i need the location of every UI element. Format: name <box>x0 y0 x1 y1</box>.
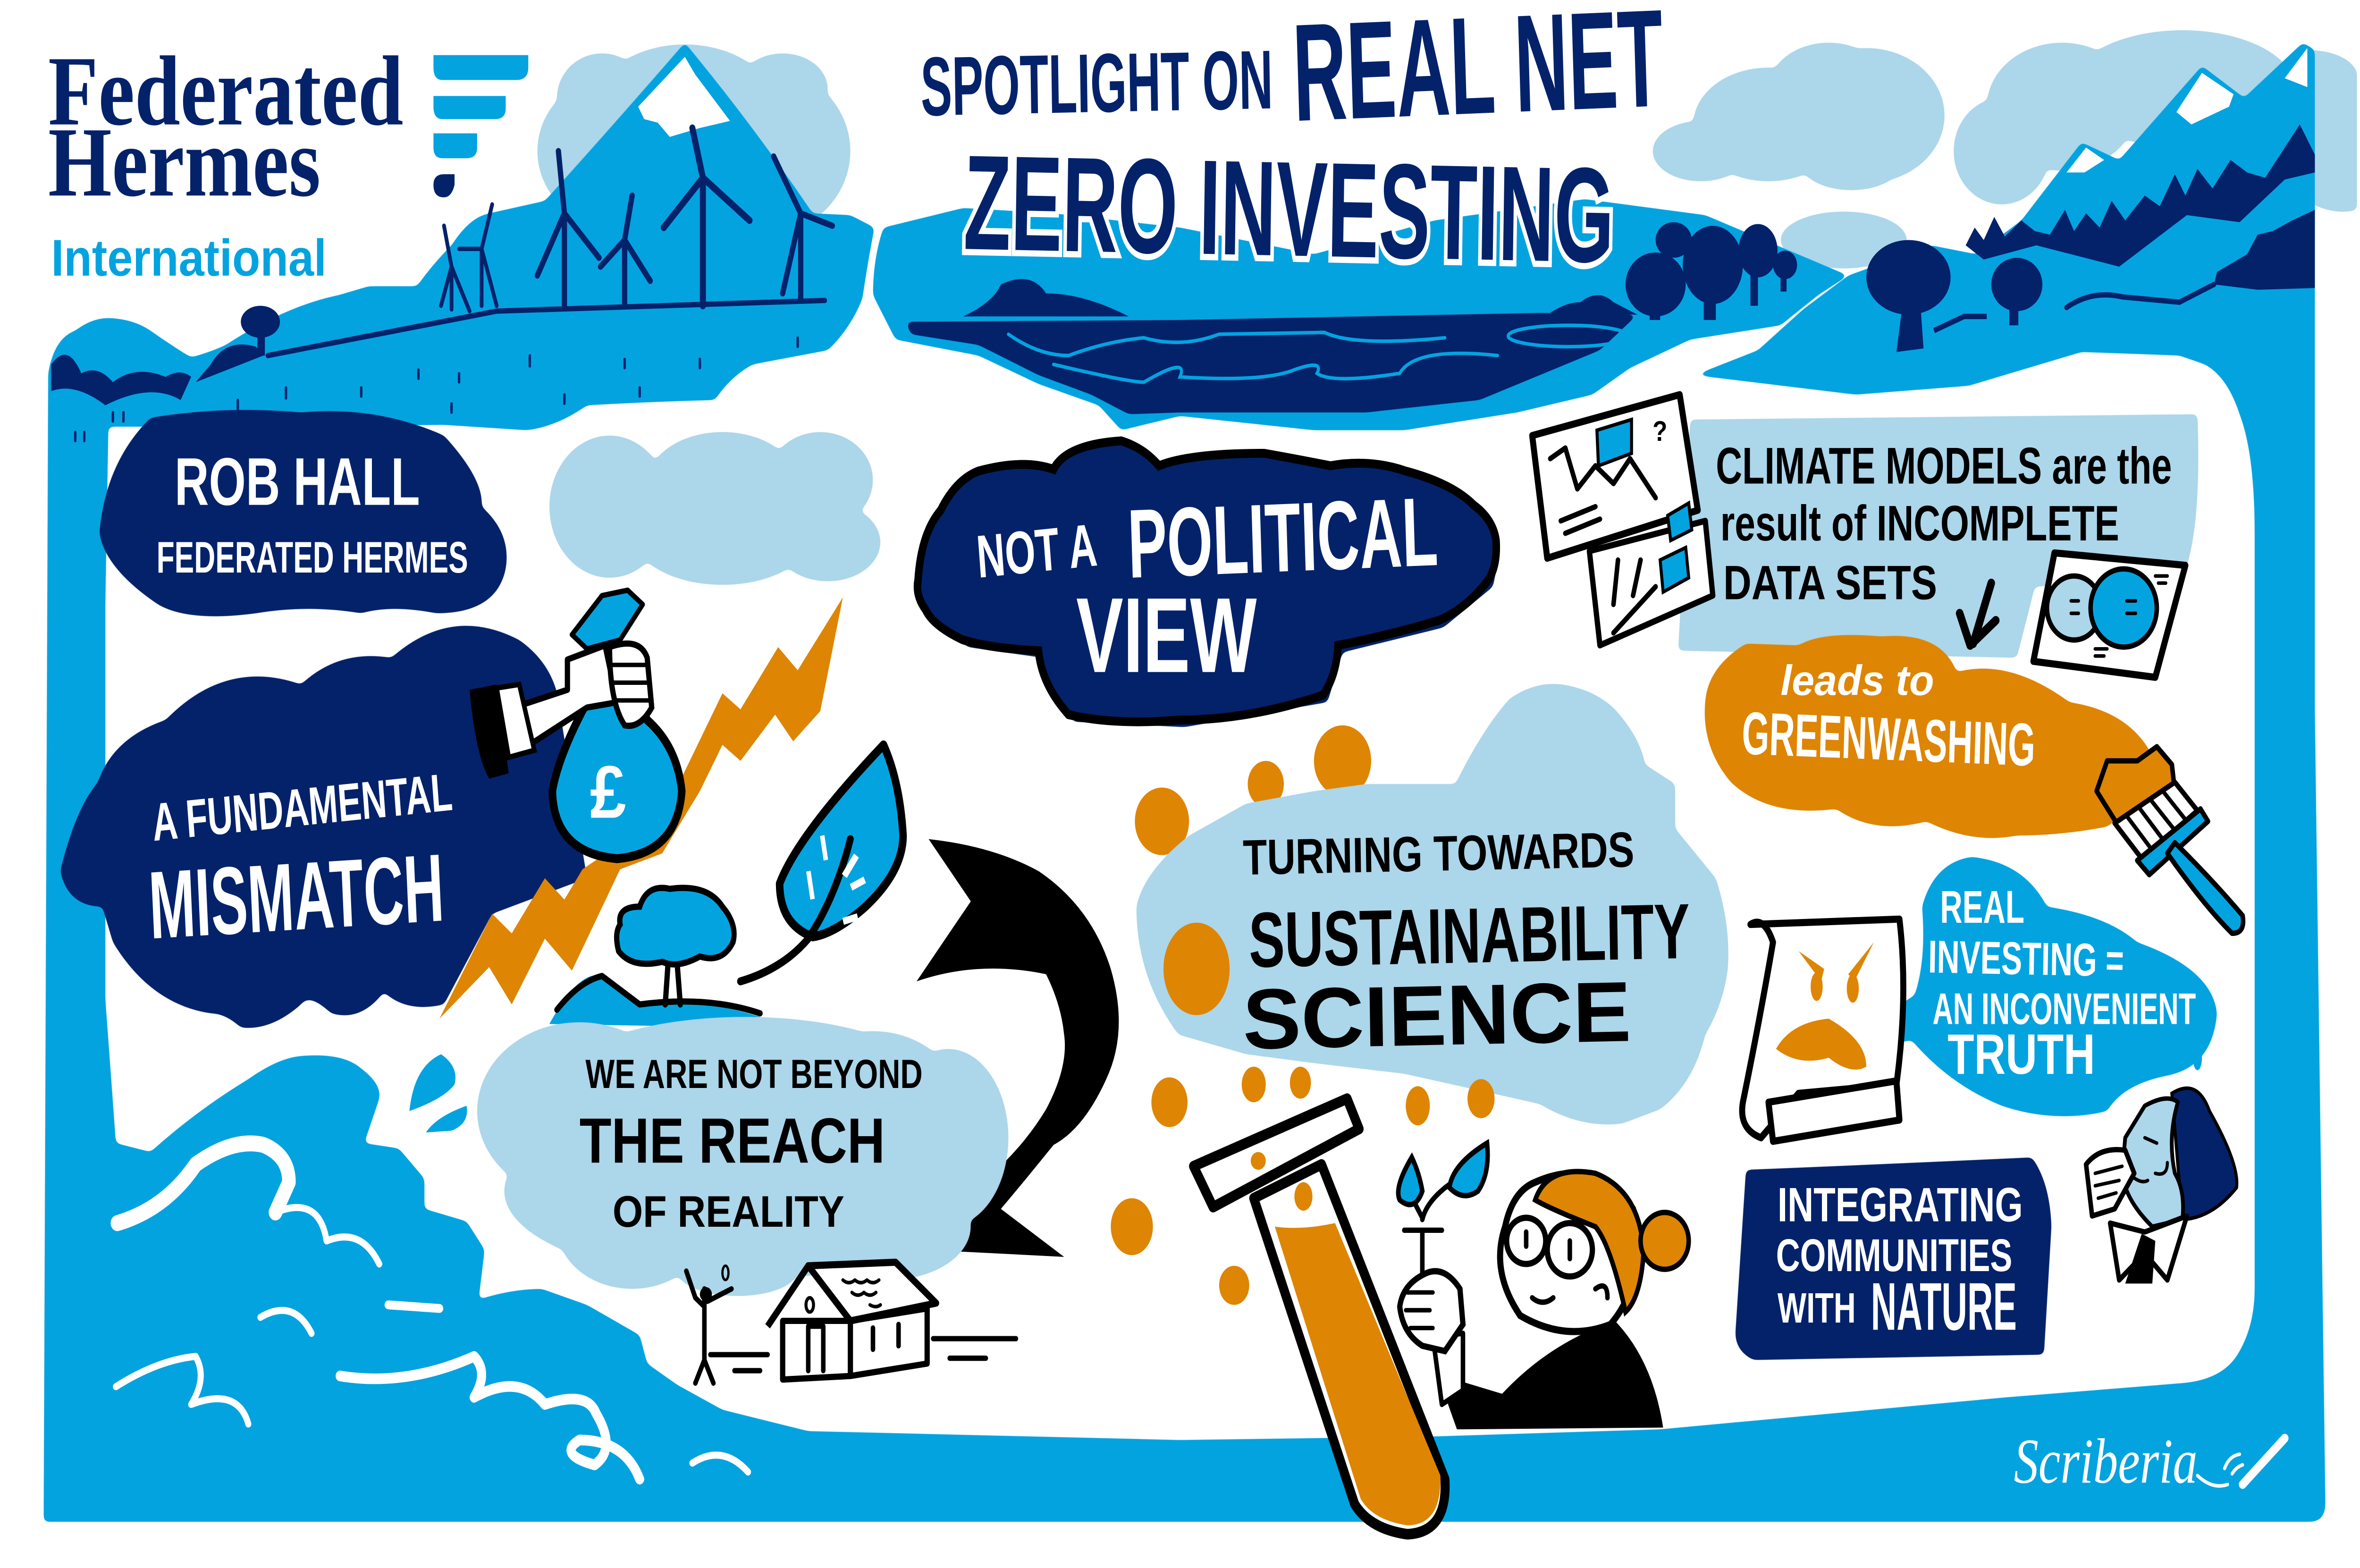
text: communities: COMMUNITIES <box>1776 1230 2012 1281</box>
text: turning towards: TURNING TOWARDS <box>1243 822 1635 885</box>
orange droplets <box>1111 725 1371 1305</box>
text: political: POLITICAL <box>1126 476 1439 599</box>
text: with: WITH <box>1778 1284 1856 1332</box>
text: greenwashing: GREENWASHING <box>1741 700 2036 779</box>
icon: hand holding money bag: £ <box>590 750 626 834</box>
navy cloud: fundamental mismatch <box>60 626 587 1028</box>
text: Rob Hall: ROB HALL <box>175 444 420 520</box>
navy panel: integrating communities <box>1736 1157 2051 1360</box>
logo: Federated Hermes International: Hermes <box>48 108 320 218</box>
text: mismatch: MISMATCH <box>147 834 446 959</box>
icon: scientist with seedling <box>1398 1143 1689 1429</box>
trees on the middle hill <box>1547 222 1797 320</box>
text: we are not beyond: WE ARE NOT BEYOND <box>585 1051 923 1097</box>
left tree and bushes <box>51 306 280 405</box>
icon: paintbrush <box>2097 747 2243 933</box>
wind turbines <box>268 128 832 355</box>
title <box>920 0 1665 291</box>
text: integrating: INTEGRATING <box>1778 1178 2023 1231</box>
arrow down to greenwashing <box>1960 583 1996 645</box>
logo: Federated Hermes International: International <box>51 229 327 287</box>
light cloud: beyond the reach of reality <box>477 1017 1008 1296</box>
river lines <box>1008 325 1628 382</box>
icon: tree on hill <box>549 888 760 1028</box>
text: truth: TRUTH <box>1947 1022 2095 1086</box>
grass ticks <box>75 338 798 441</box>
navy cloud: Rob Hall <box>99 410 507 616</box>
right mountain caps <box>2066 48 2307 172</box>
big black curved arrow <box>917 839 1119 1257</box>
orange cloud: greenwashing <box>1705 635 2152 838</box>
light cloud: sustainability science <box>1137 684 1728 1124</box>
icon: house and person <box>686 1262 1016 1383</box>
logo: Federated Hermes International: Federated <box>48 36 404 146</box>
orange lightning arrow <box>439 598 843 1019</box>
text: real: REAL <box>1940 881 2024 933</box>
white mountain cap <box>638 57 730 137</box>
text: not a: NOT A <box>974 512 1099 591</box>
clouds behind the mountains <box>537 30 2357 269</box>
text: view: VIEW <box>1076 576 1257 695</box>
icon: angry scroll <box>1742 919 1903 1141</box>
trees on the right hill <box>1866 240 2042 352</box>
island <box>963 279 1129 316</box>
icon: hand holding money bag <box>470 590 682 859</box>
climate models text panel <box>1678 414 2198 658</box>
navy cloud: not a political view <box>918 441 1500 727</box>
text: data sets: DATA SETS <box>1723 556 1937 609</box>
text: sustainability: SUSTAINABILITY <box>1248 887 1690 984</box>
icon: venn diagram tablet <box>2033 553 2185 677</box>
white wave strokes <box>116 1143 748 1479</box>
text: investing: INVESTING = <box>1928 931 2124 986</box>
speech bubble: real investing <box>1871 857 2217 1116</box>
text: a fundamental: A FUNDAMENTAL <box>150 762 454 852</box>
text: result of incomplete: result of INCOMPLETE <box>1720 496 2119 551</box>
title: SPOTLIGHT ON <box>920 33 1273 134</box>
light blue empty cloud <box>549 432 880 585</box>
icon: chart boards: ? <box>1652 415 1667 447</box>
text: climate models: CLIMATE MODELS are the <box>1716 437 2172 495</box>
text: Federated Hermes: FEDERATED HERMES <box>157 533 468 582</box>
icon: leaf <box>741 745 903 981</box>
middle hill with lake backdrop <box>873 199 1848 430</box>
water splash drops <box>409 1054 467 1132</box>
navy lake <box>906 313 1637 414</box>
icon: test tube <box>1194 1099 1445 1534</box>
icon: shocked man with drops <box>2086 1042 2237 1283</box>
logo: Federated Hermes International <box>48 36 528 287</box>
text: an inconvenient: AN INCONVENIENT <box>1932 984 2196 1034</box>
text: of reality: OF REALITY <box>613 1187 844 1236</box>
signature: Scriberia: Scriberia <box>2014 1426 2198 1497</box>
text: nature: NATURE <box>1871 1269 2017 1345</box>
text: science: SCIENCE <box>1242 964 1632 1067</box>
title: ZERO INVESTING <box>963 127 1615 291</box>
text: leads to: leads to <box>1780 657 1934 704</box>
icon: chart boards <box>1532 395 1713 645</box>
forest ridge on the right <box>1966 125 2315 267</box>
text: the reach: THE REACH <box>580 1104 885 1176</box>
small droplets below cloud <box>1242 1067 1494 1125</box>
